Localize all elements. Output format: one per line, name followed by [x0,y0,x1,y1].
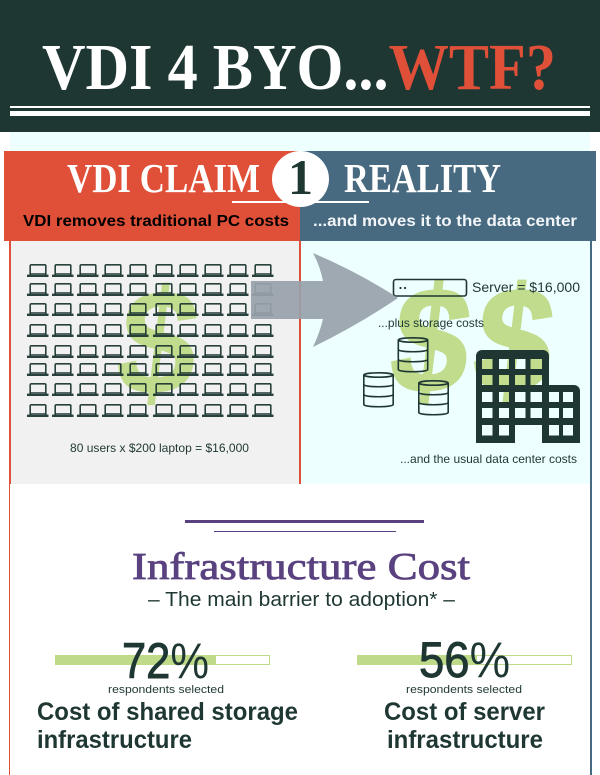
stat: shared storage [37,633,298,754]
stat: server: infrastructure [387,726,543,754]
stat: shared storage: Cost of shared storage [37,698,298,726]
stat: shared storage: respondents selected [108,684,224,696]
data center cost text: ...and the usual data center costs [400,452,577,466]
reality subheading: ...and moves it to the data center [313,213,577,230]
panel: right, reality body [301,241,592,484]
stat: shared storage: infrastructure [37,726,192,754]
icon: dollar sign behind laptops: $ [108,259,208,427]
icon: storage cylinders [364,338,448,415]
icon: data center building [476,350,580,443]
storage cost text: ...plus storage costs [378,316,484,330]
stat: server: Cost of server [384,698,545,726]
title: VDI 4 BYO...WTF? [42,31,556,104]
claim subheading: VDI removes traditional PC costs [23,213,289,230]
stat: server [357,632,572,754]
panel: infrastructure cost [9,484,592,775]
top background strip [10,132,590,151]
icon: two dollar signs: $ [466,256,563,424]
panel: section heading bar [4,149,596,241]
heading: reality: REALITY [344,155,501,201]
heading: infrastructure cost: Infrastructure Cost [132,546,471,588]
panel: left, VDI claim body [9,241,301,484]
subheading: – The main barrier to adoption* – [148,588,456,611]
stat: server: respondents selected [406,684,522,696]
icon: two dollar signs: $ [383,256,480,424]
header banner [0,0,600,132]
number badge [272,149,329,207]
laptop grid [27,265,274,417]
arrow: from PC costs to data center [251,253,398,347]
stat: server: 56% [419,632,510,688]
number badge: 1 [288,149,313,205]
heading: VDI claim: VDI CLAIM [67,155,260,201]
stat: shared storage: 72% [122,633,209,689]
icon: two dollar signs [383,256,563,424]
icon: server [394,280,466,296]
laptop cost text: 80 users x $200 laptop = $16,000 [70,441,249,455]
server cost text: Server = $16,000 [472,279,580,295]
